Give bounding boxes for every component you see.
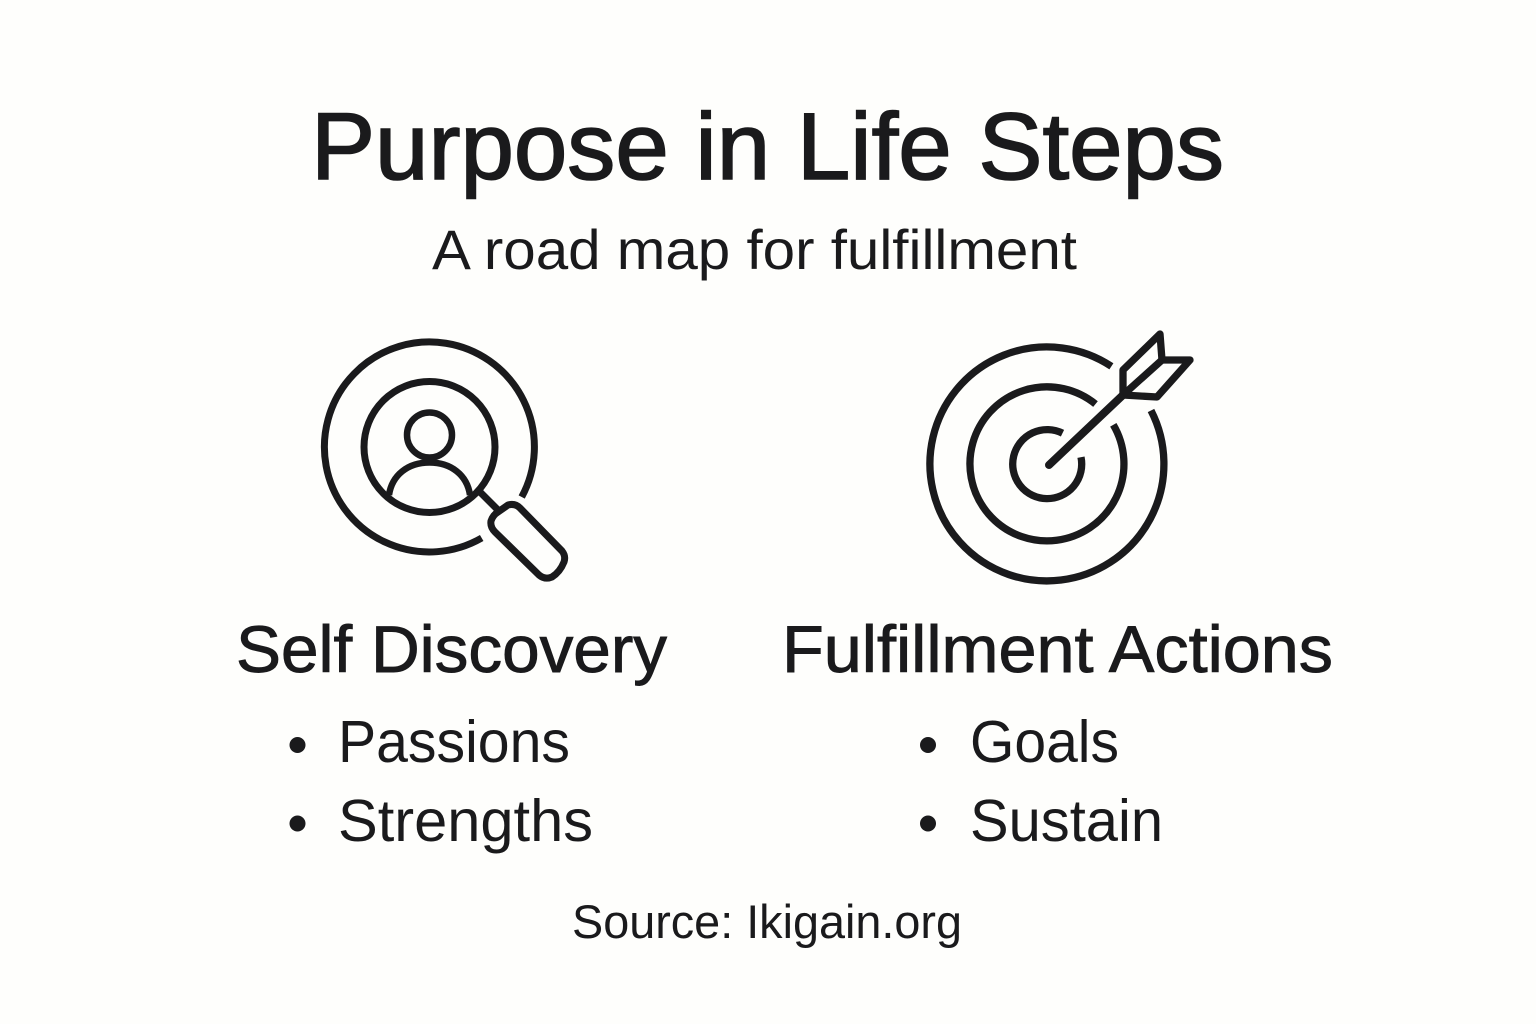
heading: fulfillment actions: Fulfillment Actions xyxy=(782,612,1333,686)
icon: magnifying glass with person xyxy=(324,342,565,578)
source note: Source: Ikigain.org xyxy=(572,895,962,948)
panel: self discovery xyxy=(236,342,667,854)
list: self discovery: Passions xyxy=(338,709,570,775)
icon: target with arrow xyxy=(930,334,1190,581)
subtitle: A road map for fulfillment xyxy=(432,218,1077,281)
panel: fulfillment actions xyxy=(782,334,1333,854)
list: fulfillment actions xyxy=(920,709,1163,854)
list: fulfillment actions: Goals xyxy=(970,709,1119,775)
list: self discovery: Strengths xyxy=(338,788,593,854)
list: fulfillment actions: Sustain xyxy=(970,788,1163,854)
list: self discovery xyxy=(290,709,593,854)
title: Purpose in Life Steps xyxy=(311,94,1224,200)
heading: self discovery: Self Discovery xyxy=(236,612,667,686)
